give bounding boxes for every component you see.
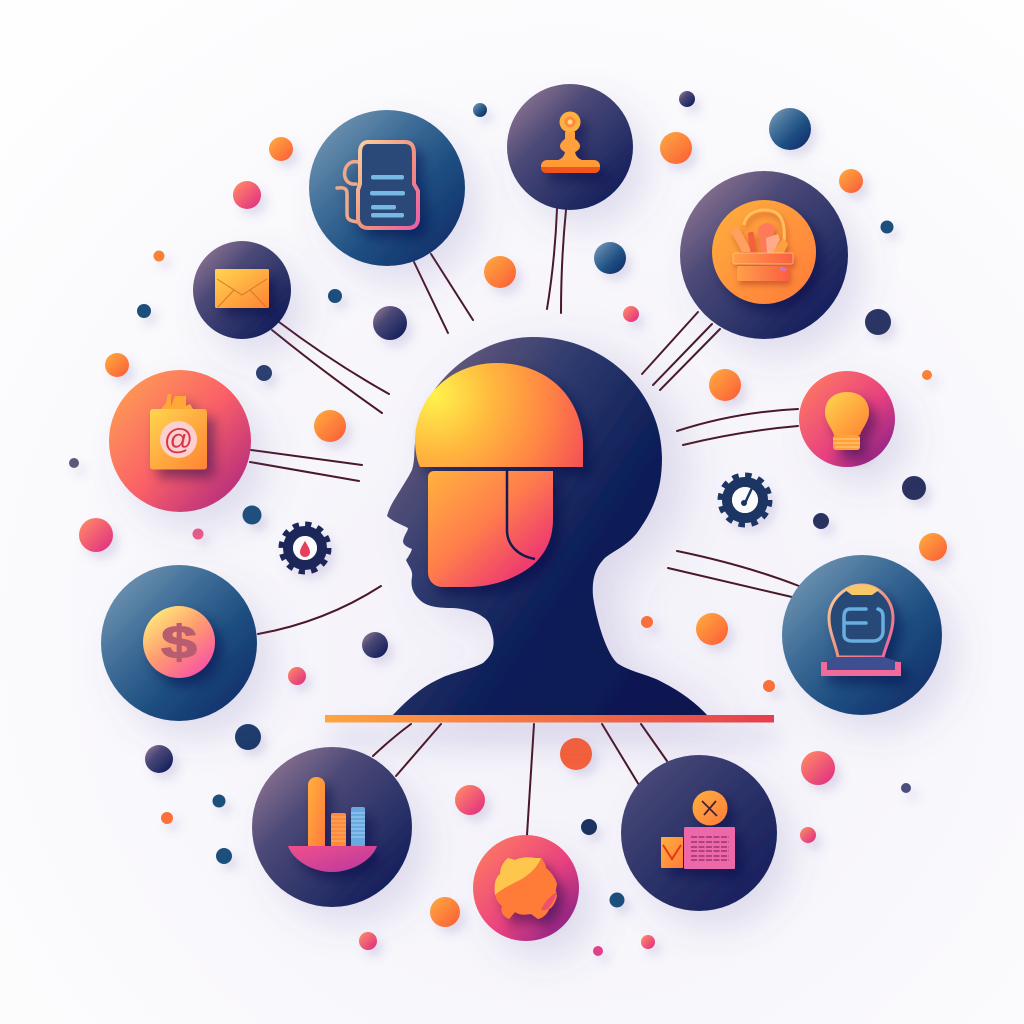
face panel: [428, 471, 553, 587]
node: dollar coin: [101, 565, 257, 721]
icon: light bulb: [825, 392, 869, 450]
icon: document: [337, 142, 418, 228]
node: basket: [680, 171, 848, 339]
base bar: [325, 715, 774, 722]
head silhouette: [387, 337, 708, 716]
icon: basket with produce: [731, 210, 793, 281]
floating decorative dots: [69, 91, 947, 956]
icon: dollar coin: [143, 606, 215, 678]
icon: at-sign bag: @: [164, 424, 193, 456]
node: helmet: [782, 555, 942, 715]
node: bar chart: [252, 747, 412, 907]
icon: bar chart in bowl: [288, 777, 377, 872]
inner divider line: [507, 469, 535, 559]
gear icon with gauge: [721, 476, 769, 524]
icon: helmet: [821, 585, 901, 676]
node: at-sign bag: [109, 370, 251, 512]
gear icon with drop: [282, 525, 328, 571]
icon: stamp: [541, 112, 600, 173]
node: document: [309, 110, 465, 266]
icon: orange gear blob: [495, 857, 557, 919]
node: gear blob: [473, 835, 579, 941]
brain dome: [415, 363, 583, 467]
central head illustration: [387, 337, 708, 716]
icon: dollar coin: $: [161, 616, 197, 668]
icon: report with coin: [661, 790, 735, 869]
node: light bulb: [799, 371, 895, 467]
icon: at-sign bag: [150, 394, 207, 470]
node: report: [621, 755, 777, 911]
node: envelope: [193, 241, 291, 339]
node: stamp: [507, 84, 633, 210]
icon: envelope: [215, 269, 269, 308]
connector lines: [250, 209, 799, 835]
inner orange disc: [712, 200, 816, 304]
